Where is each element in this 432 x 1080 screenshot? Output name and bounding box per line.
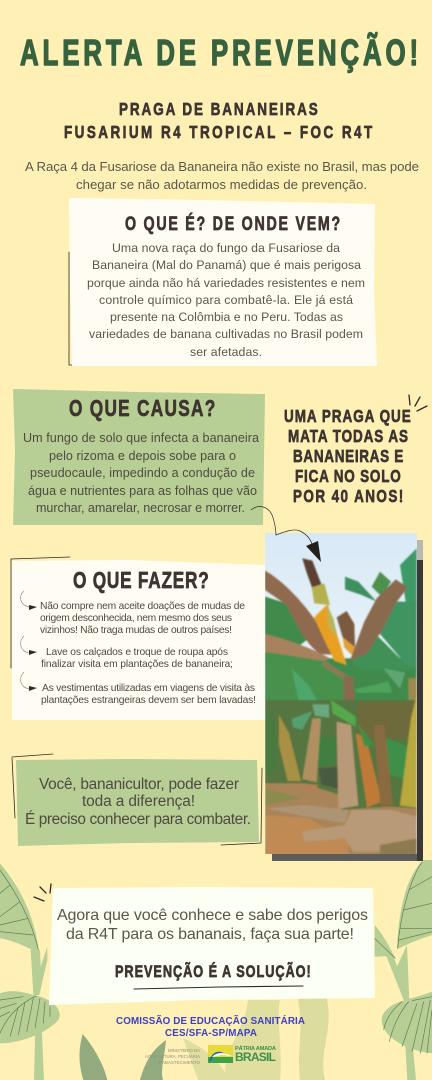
callout: praga: BANANEIRAS E xyxy=(293,447,403,467)
callout: praga: UMA PRAGA QUE xyxy=(284,407,411,427)
credit: CES/SFA-SP/MAPA xyxy=(165,1028,257,1039)
text: call to action: da R4T para os bananais, faça sua parte! xyxy=(66,926,354,943)
text: bananicultor: toda a diferença! xyxy=(82,793,195,810)
list item 3: As vestimentas utilizadas em viagens de visita às xyxy=(42,683,255,694)
text: bananicultor xyxy=(25,776,251,828)
intro text xyxy=(25,159,419,192)
lower photo xyxy=(265,695,417,855)
logo: patria amada brasil xyxy=(208,1045,276,1064)
left plant xyxy=(0,863,107,1080)
subtitle: PRAGA DE BANANEIRAS xyxy=(119,100,318,120)
icon: burst xyxy=(34,884,51,901)
subtitle xyxy=(64,100,372,143)
callout: praga: POR 40 ANOS! xyxy=(293,487,403,507)
body: o que é: presente na Colômbia e no Peru. Todas as xyxy=(110,310,343,324)
body: o que causa: pelo rizoma e depois sobe para o xyxy=(49,449,236,463)
logo: patria amada brasil: PÁTRIA AMADA xyxy=(235,1045,276,1052)
body: o que causa: Um fungo de solo que infecta a bananeira xyxy=(23,431,259,445)
list item 3: plantações estrangeiras devem ser bem lavadas! xyxy=(41,695,256,706)
body: o que causa: murchar, amarelar, necrosar e morrer. xyxy=(36,501,245,515)
body: o que é: porque ainda não há variedades resistentes e nem xyxy=(87,276,365,290)
body: o que causa: pseudocaule, impedindo a condução de xyxy=(30,466,255,480)
body: o que causa: água e nutrientes para as folhas que vão xyxy=(28,484,257,498)
heading: o que causa: O QUE CAUSA? xyxy=(69,397,215,422)
body: o que é: controle químico para combatê-la. Ele já está xyxy=(99,293,353,307)
panel: faça sua parte xyxy=(49,887,375,1005)
panel: bananicultor xyxy=(12,754,262,846)
photo: diseased banana plantation xyxy=(265,533,417,855)
credit: COMISSÃO DE EDUCAÇÃO SANITÁRIA xyxy=(116,1015,305,1027)
callout: praga xyxy=(284,395,427,507)
list item 1 xyxy=(21,591,245,636)
panel: o que é xyxy=(69,198,377,366)
logo: ministry: E ABASTECIMENTO xyxy=(158,1060,201,1065)
callout: praga: FICA NO SOLO xyxy=(295,467,401,487)
text: bananicultor: Você, bananicultor, pode fazer xyxy=(39,776,239,793)
photo shadow xyxy=(272,540,423,861)
intro text: A Raça 4 da Fusariose da Bananeira não existe no Brasil, mas pode xyxy=(25,159,419,174)
list item 2: Lave os calçados e troque de roupa após xyxy=(46,647,228,658)
list item 2 xyxy=(21,636,233,670)
intro text: chegar se não adotarmos medidas de prevenção. xyxy=(76,177,367,192)
right plant xyxy=(375,860,432,1080)
panel: o que fazer xyxy=(11,557,265,720)
body: o que é: variedades de banana cultivadas no Brasil podem xyxy=(89,327,363,341)
logo: ministry xyxy=(145,1048,201,1065)
heading: o que fazer: O QUE FAZER? xyxy=(73,569,209,594)
body: o que é xyxy=(87,241,365,359)
callout: praga: MATA TODAS AS xyxy=(288,427,408,447)
icon: burst xyxy=(409,395,427,411)
list item 1: vizinhos! Não traga mudas de outros países! xyxy=(40,625,232,636)
panel: o que causa xyxy=(13,389,265,525)
upper photo xyxy=(265,548,417,703)
subtitle: FUSARIUM R4 TROPICAL – FOC R4T xyxy=(64,123,372,143)
body: o que causa xyxy=(23,431,259,515)
credit xyxy=(116,1015,305,1039)
list item 1: origem desconhecida, nem mesmo dos seus xyxy=(40,613,232,624)
heading: prevenção: PREVENÇÃO É A SOLUÇÃO! xyxy=(115,961,311,982)
body: o que é: Uma nova raça do fungo da Fusariose da xyxy=(112,241,340,255)
text: bananicultor: É preciso conhecer para combater. xyxy=(25,811,251,828)
arrow: to photo xyxy=(251,507,321,562)
text: call to action xyxy=(57,907,368,943)
list item 2: finalizar visita em plantações de bananeira; xyxy=(41,659,233,670)
title: ALERTA DE PREVENÇÃO! xyxy=(20,33,418,73)
body: o que é: Bananeira (Mal do Panamá) que é mais perigosa xyxy=(92,258,361,272)
logo: ministry: MINISTÉRIO DA xyxy=(168,1048,200,1053)
list item 1: Não compre nem aceite doações de mudas de xyxy=(40,601,245,612)
background plants xyxy=(0,860,432,1080)
list item 3 xyxy=(21,672,256,706)
heading: o que é: O QUE É? DE ONDE VEM? xyxy=(125,213,340,235)
logo: patria amada brasil: BRASIL xyxy=(235,1050,276,1064)
body: o que é: ser afetadas. xyxy=(190,345,262,359)
text: call to action: Agora que você conhece e sabe dos perigos xyxy=(57,907,368,924)
logo: ministry: AGRICULTURA, PECUÁRIA xyxy=(145,1054,200,1059)
